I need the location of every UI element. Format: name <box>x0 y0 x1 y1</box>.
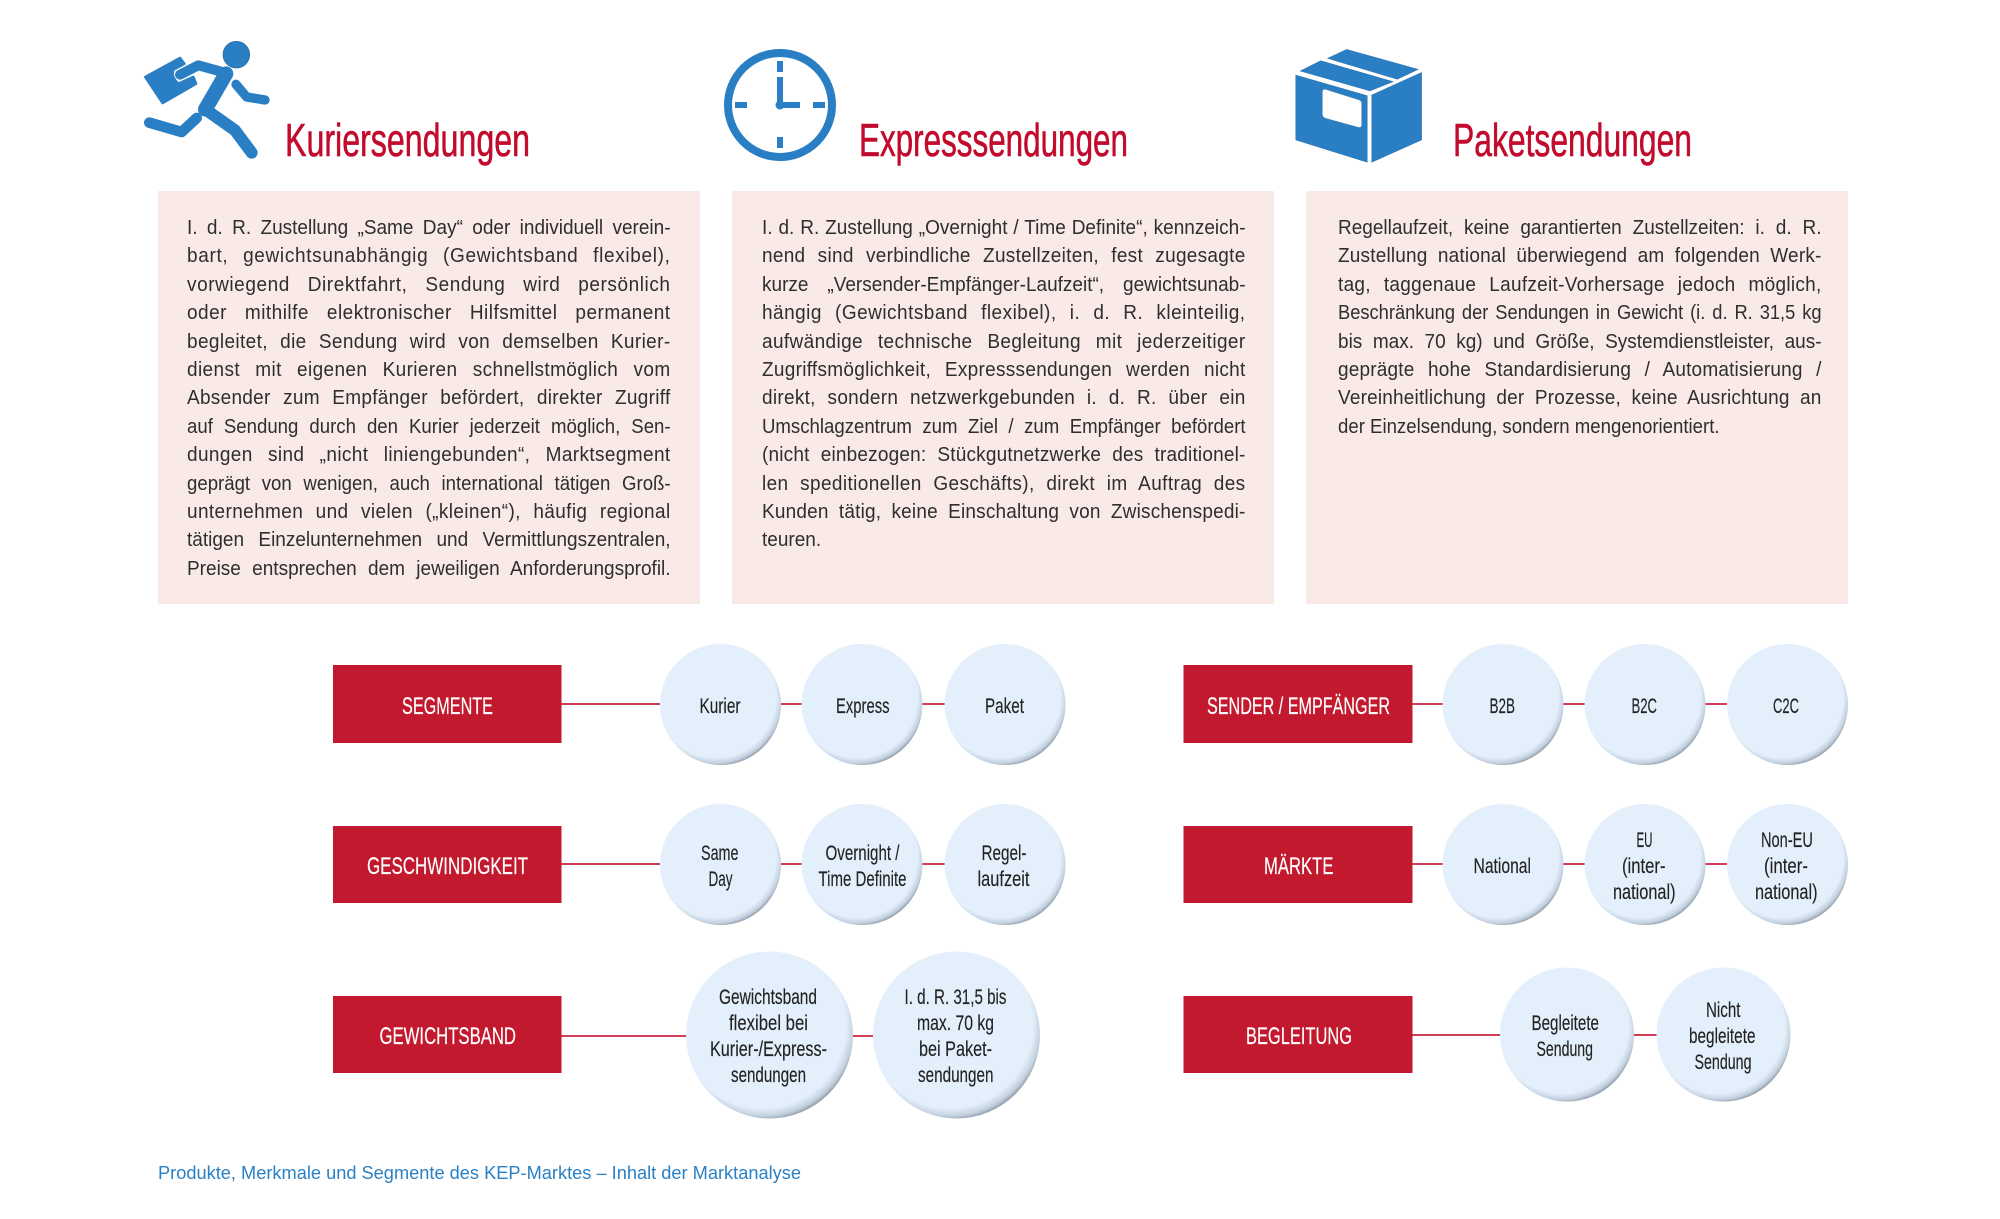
text block: Kurier: auf Sendung durch den Kurier jederzeit möglich, Sen- <box>187 416 671 438</box>
row: Märkte: (inter- <box>1622 855 1666 878</box>
row: Segmente: Kurier <box>700 695 740 718</box>
row: Gewichtsband: Gewichtsband <box>719 986 817 1009</box>
text block: Paket <box>1338 217 1822 438</box>
row: Gewichtsband: sendungen <box>731 1064 806 1087</box>
row: Geschwindigkeit: Overnight / <box>826 842 900 865</box>
text block: Kurier: Absender zum Empfänger befördert, direkter Zugriff <box>187 387 671 409</box>
row: Begleitung: Begleitete <box>1532 1012 1599 1035</box>
heading: Expresssendungen: Expresssendungen <box>859 114 1128 166</box>
text block: Express: nend sind verbindliche Zustellzeiten, fest zugesagte <box>762 245 1245 267</box>
heading: Paketsendungen: Paketsendungen <box>1453 114 1692 166</box>
panel: Paketsendungen description <box>1306 191 1848 604</box>
row: Gewichtsband: flexibel bei <box>729 1012 808 1035</box>
row: Gewichtsband <box>333 952 1040 1118</box>
row: Geschwindigkeit: laufzeit <box>978 868 1030 891</box>
text block: Kurier: oder mithilfe elektronischer Hilfsmittel permanent <box>187 302 671 324</box>
text block: Kurier <box>187 217 671 580</box>
text block: Paket: der Einzelsendung, sondern mengenorientiert. <box>1338 416 1720 438</box>
row: Begleitung: Nicht <box>1706 999 1741 1022</box>
row: Gewichtsband: GEWICHTSBAND <box>380 1023 516 1050</box>
row: Märkte: MÄRKTE <box>1264 853 1334 880</box>
text block: Kurier: tätigen Einzelunternehmen und Vermittlungszentralen, <box>187 529 671 551</box>
row: Segmente <box>333 644 1066 765</box>
text block: Kurier: geprägt von wenigen, auch international tätigen Groß- <box>187 473 671 495</box>
text block: Express: aufwändige technische Begleitung mit jederzeitiger <box>762 331 1245 353</box>
text block: Kurier: begleitet, die Sendung wird von demselben Kurier- <box>187 331 671 353</box>
row: Märkte: national) <box>1613 881 1676 904</box>
row: Märkte: Non-EU <box>1761 829 1813 852</box>
row: Geschwindigkeit: Same <box>701 842 738 865</box>
text block: Paket: geprägte hohe Standardisierung / Automatisierung / <box>1338 359 1822 381</box>
row: Märkte: national) <box>1755 881 1818 904</box>
row: Begleitung: Sendung <box>1536 1038 1593 1061</box>
row: Begleitung <box>1184 968 1790 1102</box>
row: Sender / Empfänger: B2B <box>1490 695 1515 718</box>
row: Segmente: SEGMENTE <box>402 693 493 720</box>
text block: Paket: tag, taggenaue Laufzeit-Vorhersage jedoch möglich, <box>1338 274 1822 296</box>
text block: Express: Kunden tätig, keine Einschaltung von Zwischenspedi- <box>762 501 1245 523</box>
caption: Produkte, Merkmale und Segmente des KEP-Marktes – Inhalt der Marktanalyse <box>158 1162 801 1183</box>
row: Begleitung: Sendung <box>1694 1051 1752 1074</box>
row: Segmente: Paket <box>985 695 1024 718</box>
row: Märkte: EU <box>1636 829 1652 852</box>
row: Geschwindigkeit: Time Definite <box>818 868 906 891</box>
text block: Kurier: dienst mit eigenen Kurieren schnellstmöglich vom <box>187 359 671 381</box>
row: Märkte: (inter- <box>1764 855 1808 878</box>
text block: Paket: bis max. 70 kg) und Größe, Systemdienstleister, aus- <box>1338 331 1822 353</box>
row: Sender / Empfänger: SENDER / EMPFÄNGER <box>1207 693 1390 720</box>
row: Gewichtsband: I. d. R. 31,5 bis <box>904 986 1006 1009</box>
row: Gewichtsband: max. 70 kg <box>917 1012 994 1035</box>
row: Sender / Empfänger: C2C <box>1773 695 1799 718</box>
text block: Express: Umschlagzentrum zum Ziel / zum Empfänger befördert <box>762 416 1245 438</box>
row: Gewichtsband: Kurier-/Express- <box>710 1038 827 1061</box>
icon: running courier <box>145 41 265 153</box>
row: Märkte <box>1184 804 1848 925</box>
text block: Paket: Regellaufzeit, keine garantierten Zustellzeiten: i. d. R. <box>1338 217 1822 239</box>
panel: Expresssendungen description <box>732 191 1274 604</box>
row: Segmente: Express <box>836 695 890 718</box>
text block: Express: direkt, sondern netzwerkgebunden i. d. R. über ein <box>762 387 1245 409</box>
text block: Kurier: dungen sind „nicht liniengebunden“, Marktsegment <box>187 444 671 466</box>
text block: Express: len speditionellen Geschäfts), direkt im Auftrag des <box>762 473 1245 495</box>
text block: Paket: Vereinheitlichung der Prozesse, keine Ausrichtung an <box>1338 387 1822 409</box>
row: Gewichtsband: bei Paket- <box>919 1038 992 1061</box>
panel: Kuriersendungen description <box>158 191 700 604</box>
row: Geschwindigkeit <box>333 804 1066 925</box>
text block: Express: kurze „Versender-Empfänger-Laufzeit“, gewichtsunab- <box>762 274 1245 296</box>
text block: Express <box>762 217 1246 551</box>
row: Begleitung: begleitete <box>1689 1025 1756 1048</box>
text block: Kurier: bart, gewichtsunabhängig (Gewichtsband flexibel), <box>187 245 671 267</box>
row: Sender / Empfänger: B2C <box>1632 695 1657 718</box>
row: Geschwindigkeit: GESCHWINDIGKEIT <box>367 853 528 880</box>
text block: Paket: Beschränkung der Sendungen in Gewicht (i. d. R. 31,5 kg <box>1338 302 1822 324</box>
row: Geschwindigkeit: Day <box>708 868 733 891</box>
text block: Express: (nicht einbezogen: Stückgutnetzwerke des traditionel- <box>762 444 1245 466</box>
text block: Kurier: vorwiegend Direktfahrt, Sendung wird persönlich <box>187 274 671 296</box>
text block: Express: hängig (Gewichtsband flexibel), i. d. R. kleinteilig, <box>762 302 1245 324</box>
text block: Express: I. d. R. Zustellung „Overnight / Time Definite“, kennzeich- <box>762 217 1245 239</box>
row: Begleitung: BEGLEITUNG <box>1246 1023 1352 1050</box>
row: Geschwindigkeit: Regel- <box>982 842 1026 865</box>
icon: clock <box>728 53 832 157</box>
row: Märkte: National <box>1474 855 1531 878</box>
text block: Express: teuren. <box>762 529 821 551</box>
text block: Kurier: I. d. R. Zustellung „Same Day“ oder individuell verein- <box>187 217 671 239</box>
text block: Kurier: unternehmen und vielen („kleinen“), häufig regional <box>187 501 671 523</box>
icon: parcel box <box>1296 49 1422 162</box>
row: Sender / Empfänger <box>1184 644 1848 765</box>
text block: Kurier: Preise entsprechen dem jeweiligen Anforderungsprofil. <box>187 558 671 580</box>
heading: Kuriersendungen: Kuriersendungen <box>285 114 530 166</box>
row: Gewichtsband: sendungen <box>918 1064 994 1087</box>
text block: Express: Zugriffsmöglichkeit, Expresssendungen werden nicht <box>762 359 1245 381</box>
text block: Paket: Zustellung national überwiegend am folgenden Werk- <box>1338 245 1822 267</box>
